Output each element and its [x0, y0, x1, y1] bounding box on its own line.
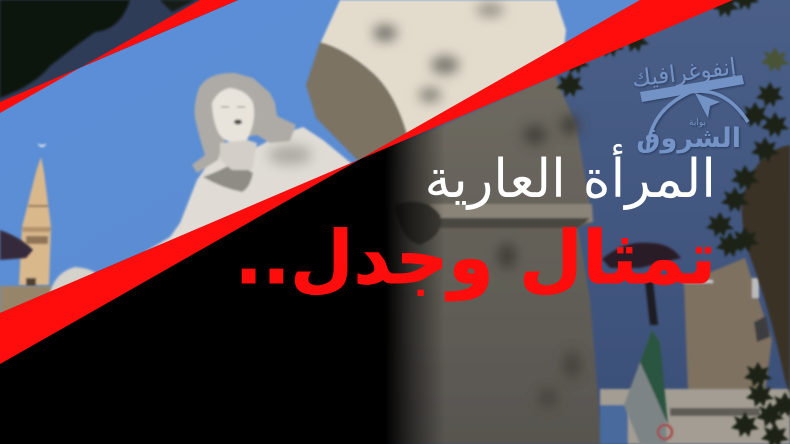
title line 1: المرأة العارية	[425, 144, 716, 210]
logo arrow	[695, 93, 720, 118]
statue: woman	[145, 73, 352, 258]
building	[683, 258, 772, 392]
logo text: shorouk: الشروق	[636, 123, 741, 154]
flag and lamp post	[602, 243, 681, 444]
red diagonal band: main bow-tie	[0, 0, 733, 364]
photo: upper bright section	[0, 0, 640, 313]
title line 2: تمثال وجدل..	[235, 216, 716, 301]
logo text: infographic: إنفوغرافيك	[631, 54, 738, 93]
tree trunk	[742, 145, 790, 395]
tree foliage	[0, 0, 130, 98]
stone statue base	[340, 76, 602, 444]
hair	[192, 73, 296, 173]
foliage	[551, 0, 790, 444]
logo	[631, 54, 748, 154]
logo arc	[648, 91, 748, 152]
chest shadow	[203, 162, 253, 192]
bright blue sky	[0, 0, 640, 313]
minaret with crescent	[19, 143, 51, 286]
stone wall	[0, 284, 52, 313]
dark sky	[0, 0, 238, 102]
statue hand	[49, 266, 96, 292]
stone block overhead	[306, 0, 566, 165]
umbrella	[0, 230, 33, 260]
statue body	[145, 127, 352, 258]
logo bar	[640, 75, 744, 102]
top-left dark tree section	[0, 0, 238, 102]
face	[212, 88, 254, 144]
lower building	[600, 389, 790, 444]
logo text: gate: بوابة	[689, 118, 706, 128]
red diagonal band: top	[0, 0, 238, 113]
